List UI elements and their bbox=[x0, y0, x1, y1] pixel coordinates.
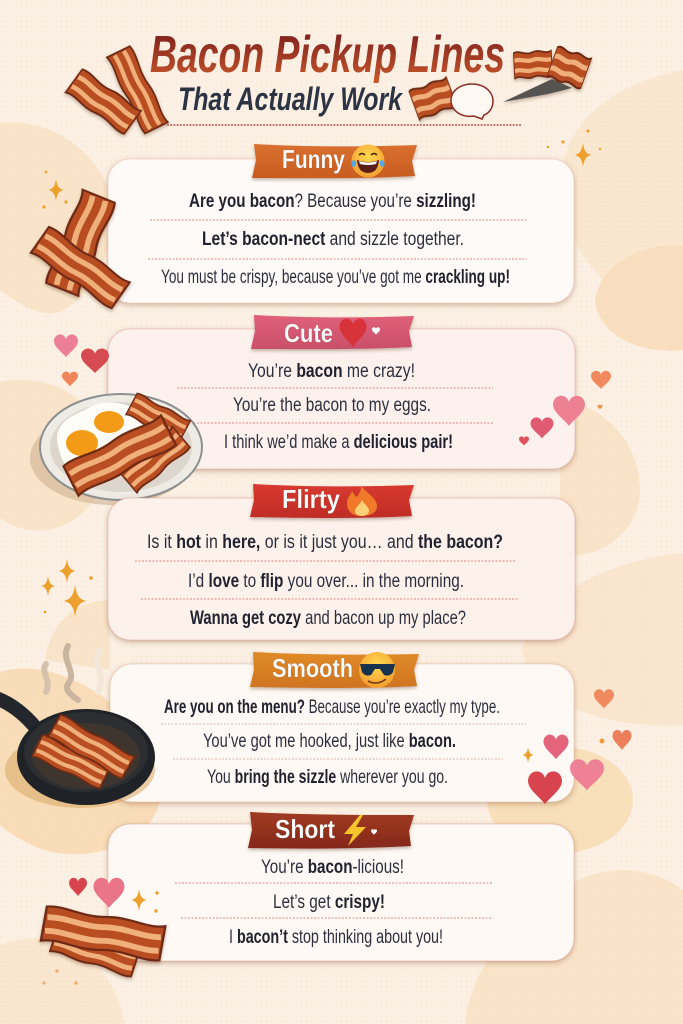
icon: steam bbox=[44, 646, 101, 700]
text: cute line 1: You’re bacon me crazy! bbox=[248, 361, 415, 382]
icons: hearts right of smooth bbox=[522, 689, 632, 804]
icon: lightning bolt bbox=[344, 815, 377, 846]
panel card: smooth bbox=[110, 664, 574, 802]
text: smooth line 3: You bring the sizzle wherever you go. bbox=[207, 767, 448, 788]
subtitle: That Actually Work: That Actually Work bbox=[178, 81, 404, 117]
panel card: short bbox=[108, 824, 574, 961]
panel: funny bbox=[108, 144, 574, 303]
text: funny line 3: You must be crispy, because you’ve got me crackling up! bbox=[161, 267, 510, 288]
panel card: cute bbox=[108, 329, 575, 469]
text: short line 2: Let’s get crispy! bbox=[273, 892, 385, 913]
text: cute line 3: I think we’d make a delicious pair! bbox=[224, 432, 453, 453]
ribbon: cute: Cute bbox=[284, 318, 333, 348]
text: cute line 2: You’re the bacon to my eggs. bbox=[233, 395, 431, 416]
panel card: flirty bbox=[108, 498, 575, 640]
text: funny line 2: Let’s bacon-nect and sizzle together. bbox=[202, 229, 464, 250]
icons: sparkles left of flirty bbox=[41, 559, 93, 617]
icon: sparkles funny bbox=[42, 171, 68, 209]
ribbon: short bbox=[248, 812, 414, 849]
icon: folded bacon top right bbox=[503, 46, 592, 102]
ribbon: funny: Funny bbox=[282, 144, 345, 174]
panel card: funny bbox=[108, 159, 574, 303]
icon: red heart emoji bbox=[340, 319, 380, 347]
text: flirty line 1: Is it hot in here, or is it just you… and the bacon? bbox=[147, 532, 503, 553]
icon: bacon strips short bbox=[41, 905, 165, 978]
icon: sparkle top right bbox=[547, 129, 601, 167]
panel: cute bbox=[108, 315, 575, 469]
text: funny line 1: Are you bacon? Because you’re sizzling! bbox=[189, 191, 476, 212]
text: flirty line 2: I’d love to flip you over... in the morning. bbox=[188, 571, 464, 592]
title: Bacon Pickup Lines: Bacon Pickup Lines bbox=[150, 26, 505, 84]
icon: fire emoji bbox=[347, 485, 377, 516]
icon: plate with eggs and bacon bbox=[30, 392, 202, 505]
ribbon: funny bbox=[252, 144, 417, 178]
ribbon: smooth: Smooth bbox=[272, 653, 353, 683]
title divider bbox=[167, 124, 522, 126]
icon: frying pan with bacon bbox=[0, 698, 155, 808]
panel: smooth bbox=[110, 652, 574, 802]
icons: hearts left of cute bbox=[54, 334, 109, 386]
icon: bacon strips top left bbox=[65, 46, 168, 135]
text: flirty line 3: Wanna get cozy and bacon up my place? bbox=[190, 608, 466, 629]
icon: sunglasses emoji bbox=[359, 652, 395, 688]
ribbon: short: Short bbox=[275, 814, 335, 844]
ribbon: cute bbox=[251, 315, 414, 349]
decoration: crumbs bottom left bbox=[42, 969, 78, 985]
ribbon: smooth bbox=[250, 652, 419, 688]
text: short line 3: I bacon’t stop thinking about you! bbox=[229, 927, 443, 948]
ribbon: flirty bbox=[250, 484, 414, 518]
icon: bacon strips funny bbox=[31, 190, 130, 309]
icons: hearts and sparkle short bbox=[49, 878, 159, 913]
panel: flirty bbox=[108, 484, 575, 640]
text: short line 1: You’re bacon-licious! bbox=[261, 857, 404, 878]
text: smooth line 1: Are you on the menu? Because you’re exactly my type. bbox=[164, 697, 500, 718]
ribbon: flirty: Flirty bbox=[282, 484, 340, 514]
icon: laughing emoji bbox=[352, 144, 384, 178]
icon: bacon and speech bubble bbox=[409, 77, 493, 120]
icons: hearts right of cute bbox=[519, 371, 611, 446]
text: smooth line 2: You’ve got me hooked, just like bacon. bbox=[203, 731, 456, 752]
panel: short bbox=[108, 812, 574, 961]
